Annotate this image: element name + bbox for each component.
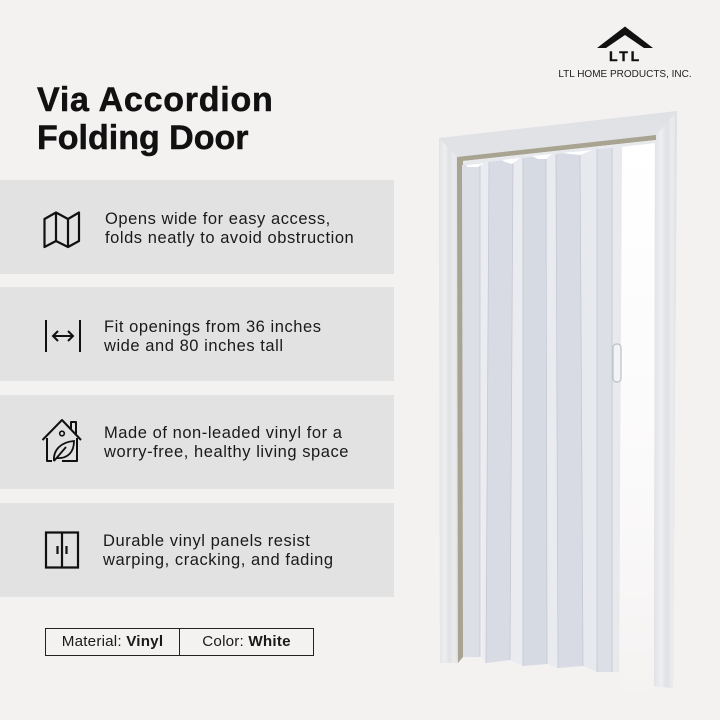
text: fit openings: Fit openings from 36 inches	[104, 318, 322, 336]
door opening	[620, 142, 655, 690]
spec: material	[46, 629, 180, 655]
text: durable: warping, cracking, and fading	[103, 551, 334, 569]
text: healthy living: Made of non-leaded vinyl for a	[104, 424, 342, 442]
icon: width arrows	[45, 320, 81, 352]
accordion door panels	[462, 147, 622, 672]
logo: LTL Home Products	[558, 26, 692, 80]
text: fit openings: wide and 80 inches tall	[104, 337, 284, 355]
text: durable	[103, 532, 334, 569]
text: healthy living: worry-free, healthy living space	[104, 443, 349, 461]
logo: LTL Home Products: LTL HOME PRODUCTS, INC.	[558, 69, 692, 80]
door handle	[613, 344, 621, 382]
icon: house with leaf	[42, 419, 82, 462]
panel: easy access	[0, 180, 394, 274]
panel: durable panels	[0, 503, 394, 597]
icon: double door	[44, 531, 80, 569]
spec: color: Color: White	[202, 633, 291, 650]
text: opens wide	[105, 210, 354, 247]
title	[36, 81, 273, 157]
text: durable: Durable vinyl panels resist	[103, 532, 310, 550]
icon: folding map	[43, 211, 80, 248]
text: fit openings	[104, 318, 322, 355]
spec box: material and color	[45, 628, 314, 656]
title: Folding Door	[37, 119, 249, 157]
text: opens wide: folds neatly to avoid obstruction	[105, 229, 354, 247]
panel: non-leaded vinyl	[0, 395, 394, 489]
text: opens wide: Opens wide for easy access,	[105, 210, 331, 228]
spec: material: Material: Vinyl	[62, 633, 163, 650]
door frame	[439, 111, 677, 688]
panel: fit openings	[0, 287, 394, 381]
title: Via Accordion	[37, 81, 273, 119]
text: healthy living	[104, 424, 349, 461]
